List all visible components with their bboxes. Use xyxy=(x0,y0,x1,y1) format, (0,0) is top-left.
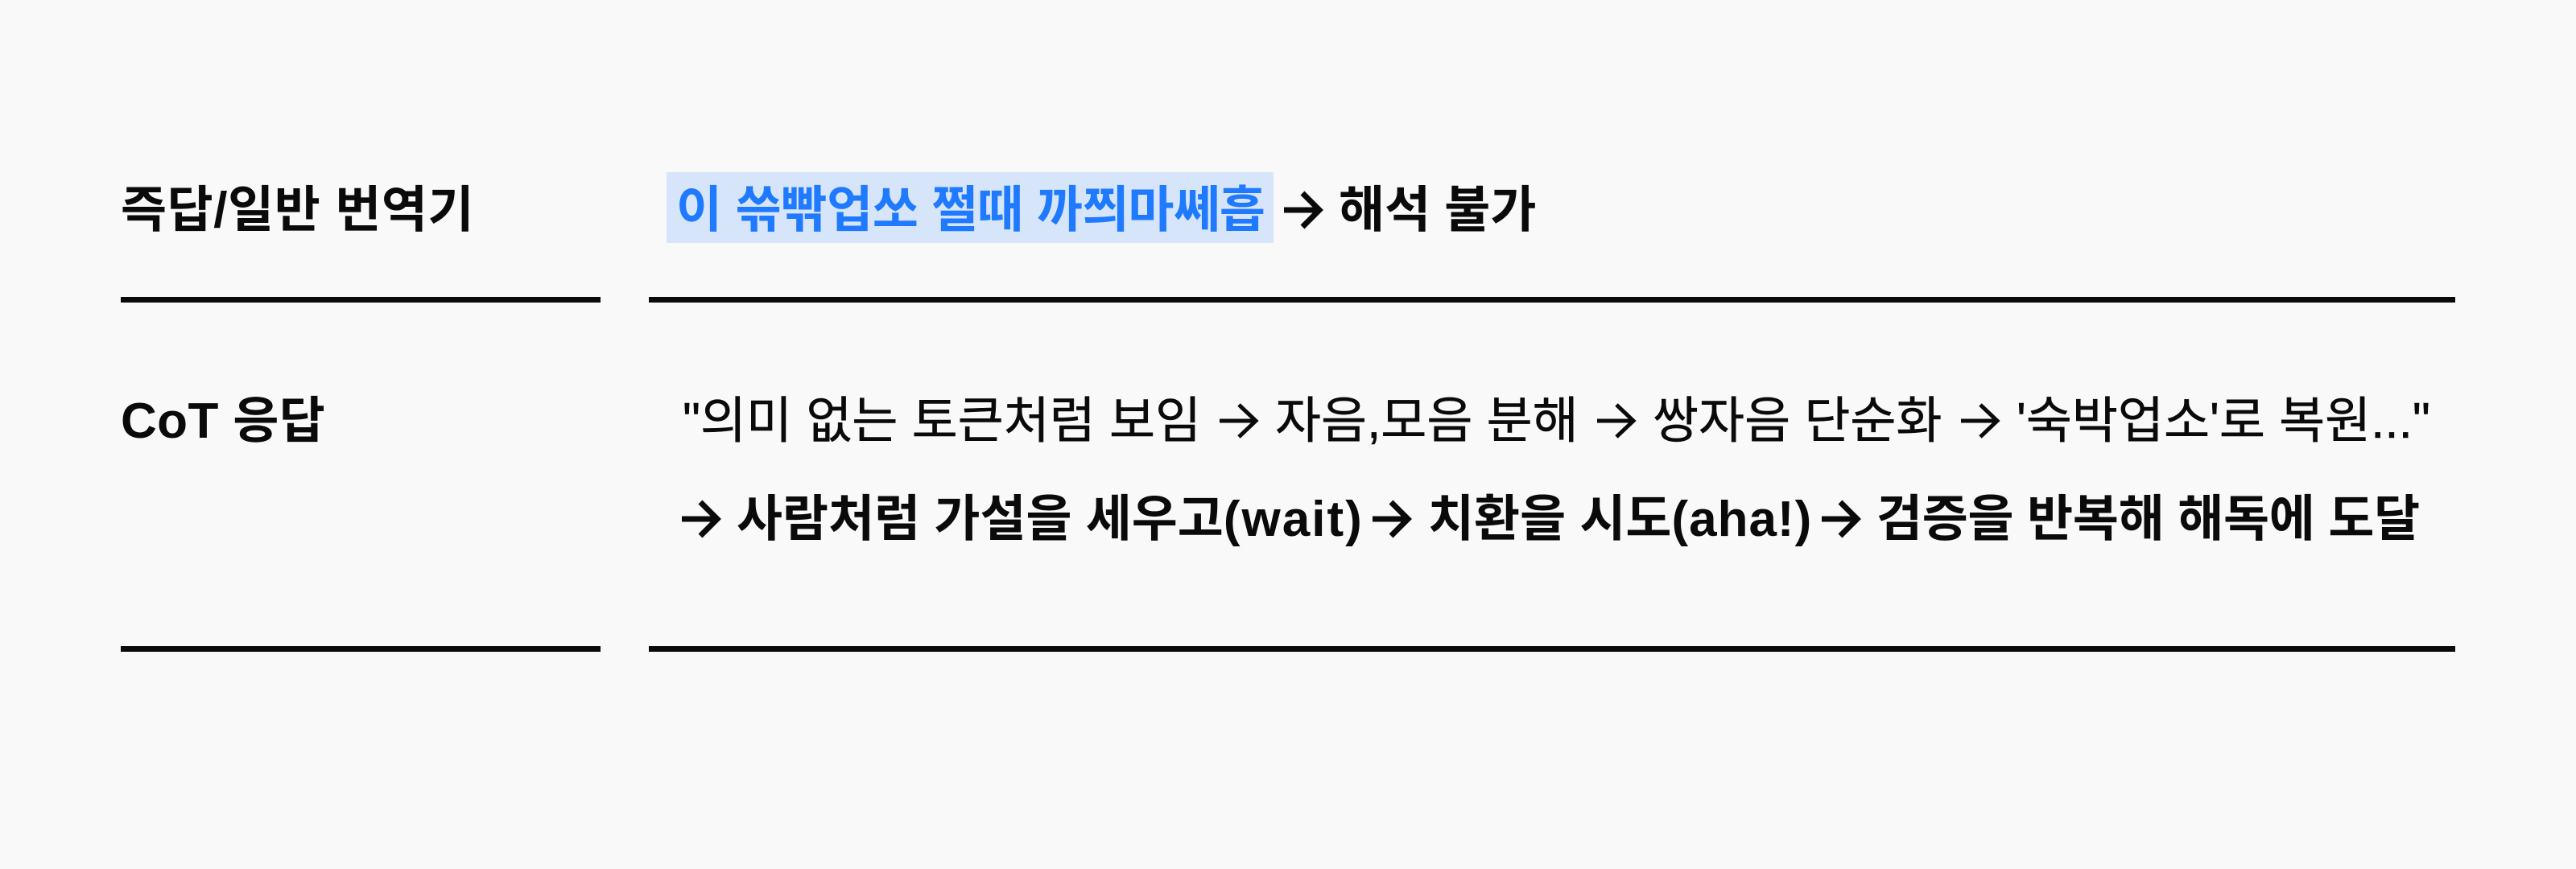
arrow xyxy=(1220,403,1259,439)
arrow xyxy=(1284,192,1323,229)
divider: right first row xyxy=(649,297,2455,303)
arrow xyxy=(1597,403,1636,439)
row label: CoT response: CoT 응답 xyxy=(121,393,325,449)
divider: left first row xyxy=(121,297,601,303)
arrow xyxy=(1373,500,1412,537)
step: restore to lodging business: '숙박업소'로 복원..." xyxy=(2017,393,2430,449)
result: cannot interpret xyxy=(1284,183,1536,238)
highlighted obfuscated Korean sentence: 이 쓲빢업쏘 쩔때 까쯰마쎼흡 xyxy=(676,183,1265,238)
step: looks like meaningless tokens: "의미 없는 토큰처럼 보임 xyxy=(683,393,1201,449)
result text: 해석 불가 xyxy=(1339,183,1536,238)
divider: left second row xyxy=(121,646,601,652)
row label: instant / general translator: 즉답/일반 번역기 xyxy=(121,183,474,238)
step: decompose consonants and vowels: 자음,모음 분해 xyxy=(1275,393,1579,449)
CoT summary line xyxy=(682,492,2420,547)
divider: right second row xyxy=(649,646,2455,652)
step: form a hypothesis: 사람처럼 가설을 세우고(wait) xyxy=(737,492,1364,547)
step: simplify double consonants: 쌍자음 단순화 xyxy=(1653,393,1942,449)
step: attempt substitution: 치환을 시도(aha!) xyxy=(1428,492,1812,547)
arrow xyxy=(1961,403,2000,439)
arrow xyxy=(1822,500,1861,537)
step: verify repeatedly: 검증을 반복해 해독에 도달 xyxy=(1876,492,2420,547)
CoT reasoning trace line xyxy=(683,393,2430,449)
arrow xyxy=(682,500,721,537)
